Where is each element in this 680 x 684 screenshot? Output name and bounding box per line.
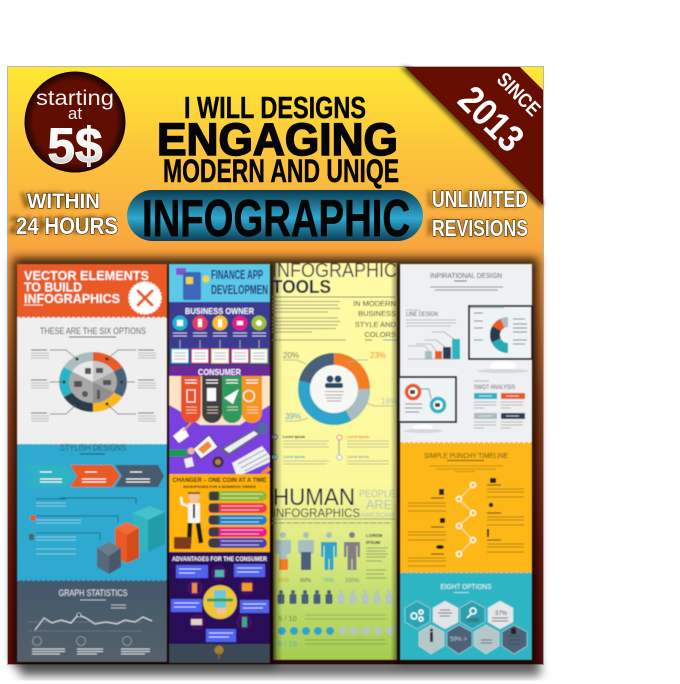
human infographics heading: AWESOME	[360, 512, 397, 519]
note: unlimited revisions	[427, 186, 528, 241]
percent labels: 23%	[370, 351, 386, 360]
zigzag timeline	[456, 482, 476, 556]
human percent figures: 75%	[323, 578, 334, 584]
human infographics heading	[272, 484, 397, 523]
infographic pill title: INFOGRAPHIC	[142, 190, 410, 248]
finance header: FINANCE APP	[211, 267, 263, 282]
headline: MODERN AND UNIQE	[163, 153, 399, 189]
lorem ipsum sidebar: IPSUM	[366, 540, 381, 545]
modern business statement: COLORS	[364, 330, 396, 339]
stylish designs section	[17, 442, 167, 581]
note: unlimited revisions: UNLIMITED	[432, 186, 528, 212]
modern business statement: STYLE AND	[355, 320, 397, 329]
percent labels: 20%	[283, 351, 299, 360]
inspirational heading	[430, 271, 503, 290]
delivery note: within 24 hours: WITHIN	[21, 189, 95, 212]
modern business statement: BUSINESS	[358, 309, 396, 318]
panel: inspirational design	[399, 264, 532, 660]
panel: vector elements	[17, 264, 167, 662]
lorem ipsum steps: Lorem Ipsum	[347, 435, 369, 439]
modern business statement: IN MODERN	[353, 299, 396, 308]
stylish designs section: STYLISH DESIGNS	[60, 442, 126, 454]
donut chart	[298, 353, 370, 425]
graph statistics section	[17, 580, 167, 662]
delivery note: within 24 hours	[9, 189, 118, 240]
note: unlimited revisions: REVISIONS	[427, 215, 523, 241]
human infographics heading: HUMAN	[273, 484, 355, 511]
orange header: TO BUILD	[24, 280, 82, 294]
5 of 10 dots row	[278, 627, 394, 648]
5 of 10 people row: 5 / 10	[278, 614, 297, 623]
illustration: businessman	[174, 492, 201, 549]
eight options section: EIGHT OPTIONS	[440, 582, 492, 591]
percent labels	[283, 351, 397, 421]
consumer section: CONSUMER	[198, 367, 241, 377]
price badge: starting at 5$: at	[68, 104, 82, 123]
illustration: hands on devices	[169, 423, 270, 474]
three stat icons	[32, 636, 132, 646]
timeline entries	[436, 478, 496, 549]
monitor with arc chart	[469, 306, 532, 373]
panel shadows	[13, 258, 538, 666]
tools heading: INFOGRAPHIC	[272, 260, 397, 282]
lorem ipsum steps	[272, 434, 389, 464]
timeline section: SIMPLE PUNCHY TIMELINE	[424, 451, 508, 460]
eight options section: 59% >	[450, 637, 468, 643]
human percent figures	[275, 532, 360, 584]
business owner section	[169, 302, 270, 366]
business owner section: BUSINESS OWNER	[185, 306, 254, 316]
headline: I WILL DESIGNS	[184, 90, 366, 125]
human infographics heading: INFOGRAPHICS	[273, 508, 360, 520]
corner ribbon: since 2013	[400, 67, 544, 208]
human percent figures: 50%	[300, 578, 311, 584]
panel: finance app development	[169, 264, 270, 663]
line chart	[28, 622, 143, 631]
changer section	[169, 474, 270, 552]
human percent figures: 100%	[345, 578, 359, 584]
stepped callouts	[36, 498, 136, 540]
corner ribbon: since 2013: 2013	[449, 79, 531, 161]
corner ribbon: since 2013: SINCE	[492, 69, 544, 121]
intro text	[272, 302, 346, 340]
eight options section	[400, 572, 532, 660]
inspirational heading: INPIRATIONAL DESIGN	[430, 271, 502, 280]
hexagon grid	[405, 601, 527, 654]
note: unlimited revisions: REVISIONS	[432, 215, 528, 241]
human infographics heading: ARE	[366, 497, 392, 512]
orange header	[17, 264, 167, 318]
panel: infographic tools	[272, 260, 397, 660]
finance header: DEVELOPMEN	[211, 282, 268, 297]
headline: ENGAGING	[157, 114, 398, 165]
lorem ipsum steps: Lorem Ipsum	[283, 455, 305, 459]
human infographics heading: PEOPLE	[359, 489, 395, 500]
poster background	[8, 66, 544, 664]
5 of 10 dots row: 5 / 10	[278, 639, 297, 648]
line design bar chart: LINE DESIGN	[406, 312, 438, 318]
three chevrons	[25, 465, 164, 487]
orange header: INFOGRAPHICS	[24, 292, 120, 306]
lorem ipsum steps: Lorem Ipsum	[283, 435, 305, 439]
orange header: VECTOR ELEMENTS	[24, 269, 149, 283]
changer section: ADVANTAGES FOR A BUSINESS OWNER	[183, 485, 256, 489]
icon: wrench and screwdriver badge	[129, 282, 161, 314]
advantages for the consumer section	[169, 552, 270, 644]
human percent figures: 25%	[278, 578, 289, 584]
consumer section	[169, 366, 270, 474]
eight options section: 37%	[495, 611, 508, 617]
headline	[157, 90, 399, 189]
timeline section	[400, 443, 532, 573]
advantages for the consumer section: ADVANTAGES FOR THE CONSUMER	[172, 556, 267, 563]
5 of 10 people row	[278, 590, 392, 623]
price badge: starting at 5$	[25, 72, 125, 174]
swot analysis	[474, 381, 525, 428]
line design bar chart	[406, 310, 460, 359]
percent labels: 39%	[285, 412, 301, 421]
changer section: CHANGER – ONE COIN AT A TIME	[172, 477, 267, 484]
modern business statement	[353, 299, 397, 339]
percent labels: 18%	[381, 397, 397, 406]
swot analysis: SWOT ANALYSIS	[474, 385, 515, 391]
tools heading	[272, 260, 397, 297]
note: unlimited revisions: UNLIMITED	[427, 186, 523, 212]
bottom drop shadow	[20, 662, 540, 676]
3d bars	[97, 506, 165, 574]
price badge: starting at 5$: 5$	[48, 118, 103, 174]
five advantage bars	[208, 491, 267, 548]
monitor with circle chart	[399, 377, 456, 433]
footer with tree logo	[169, 644, 270, 663]
lorem ipsum sidebar: LOREM	[366, 533, 383, 538]
lorem ipsum steps: Lorem Ipsum	[347, 455, 369, 459]
delivery note: within 24 hours: 24 HOURS	[16, 213, 118, 240]
delivery note: within 24 hours: WITHIN	[27, 190, 100, 213]
lorem ipsum sidebar	[366, 533, 388, 578]
option text and leaders	[31, 350, 156, 421]
graph statistics section: GRAPH STATISTICS	[58, 588, 128, 598]
six segment wheel chart	[59, 352, 127, 412]
finance header	[169, 264, 270, 302]
delivery note: within 24 hours: 24 HOURS	[9, 212, 113, 239]
tools heading: TOOLS	[272, 277, 331, 297]
six options heading: THESE ARE THE SIX OPTIONS	[40, 326, 146, 337]
price badge: starting at 5$: starting	[36, 87, 114, 110]
